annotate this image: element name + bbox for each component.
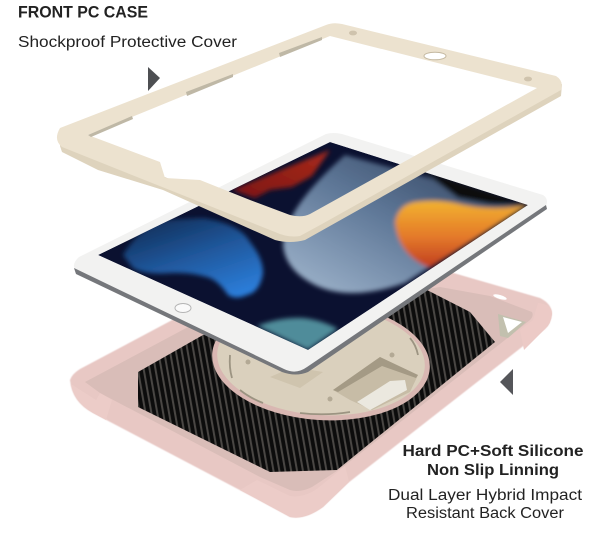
- cutout with white opening: [498, 314, 526, 338]
- corner bumper: right: [520, 303, 552, 350]
- heading: hard pc soft silicone: Hard PC+Soft Silicone: [402, 443, 584, 460]
- frame lower side: [60, 84, 562, 242]
- frame top face: [57, 23, 562, 237]
- text: dual layer description: Resistant Back Cover: [406, 505, 564, 522]
- rotating disc: [208, 295, 434, 427]
- screen wallpaper: [98, 142, 528, 350]
- inner tray: [85, 287, 533, 491]
- carbon lining: [138, 290, 495, 472]
- disc slots: [230, 338, 418, 414]
- corner bumper: left: [71, 384, 112, 420]
- text: dual layer description: [388, 487, 583, 522]
- subheading: shockproof protective cover: Shockproof Protective Cover: [18, 34, 237, 51]
- heading: front pc case: FRONT PC CASE: [18, 4, 148, 22]
- home button: [175, 304, 191, 312]
- corner bumper: bottom: [240, 466, 349, 518]
- text: dual layer description: Dual Layer Hybrid Impact: [388, 487, 583, 504]
- tablet: [74, 133, 547, 374]
- handle recess: [333, 357, 418, 410]
- heading: hard pc soft silicone: Non Slip Linning: [427, 462, 559, 479]
- square plate: [270, 367, 323, 388]
- back case: [70, 272, 552, 518]
- frame cutouts: [349, 31, 357, 35]
- heading: hard pc soft silicone: [402, 443, 584, 479]
- front case frame: [57, 23, 562, 242]
- disc holes: [246, 352, 394, 402]
- tablet body: [74, 133, 547, 372]
- rubber shell: [70, 272, 552, 518]
- arrow: pointing to back case: [500, 369, 513, 395]
- arrow: pointing to front case: [148, 67, 160, 91]
- frame tabs: [88, 37, 322, 137]
